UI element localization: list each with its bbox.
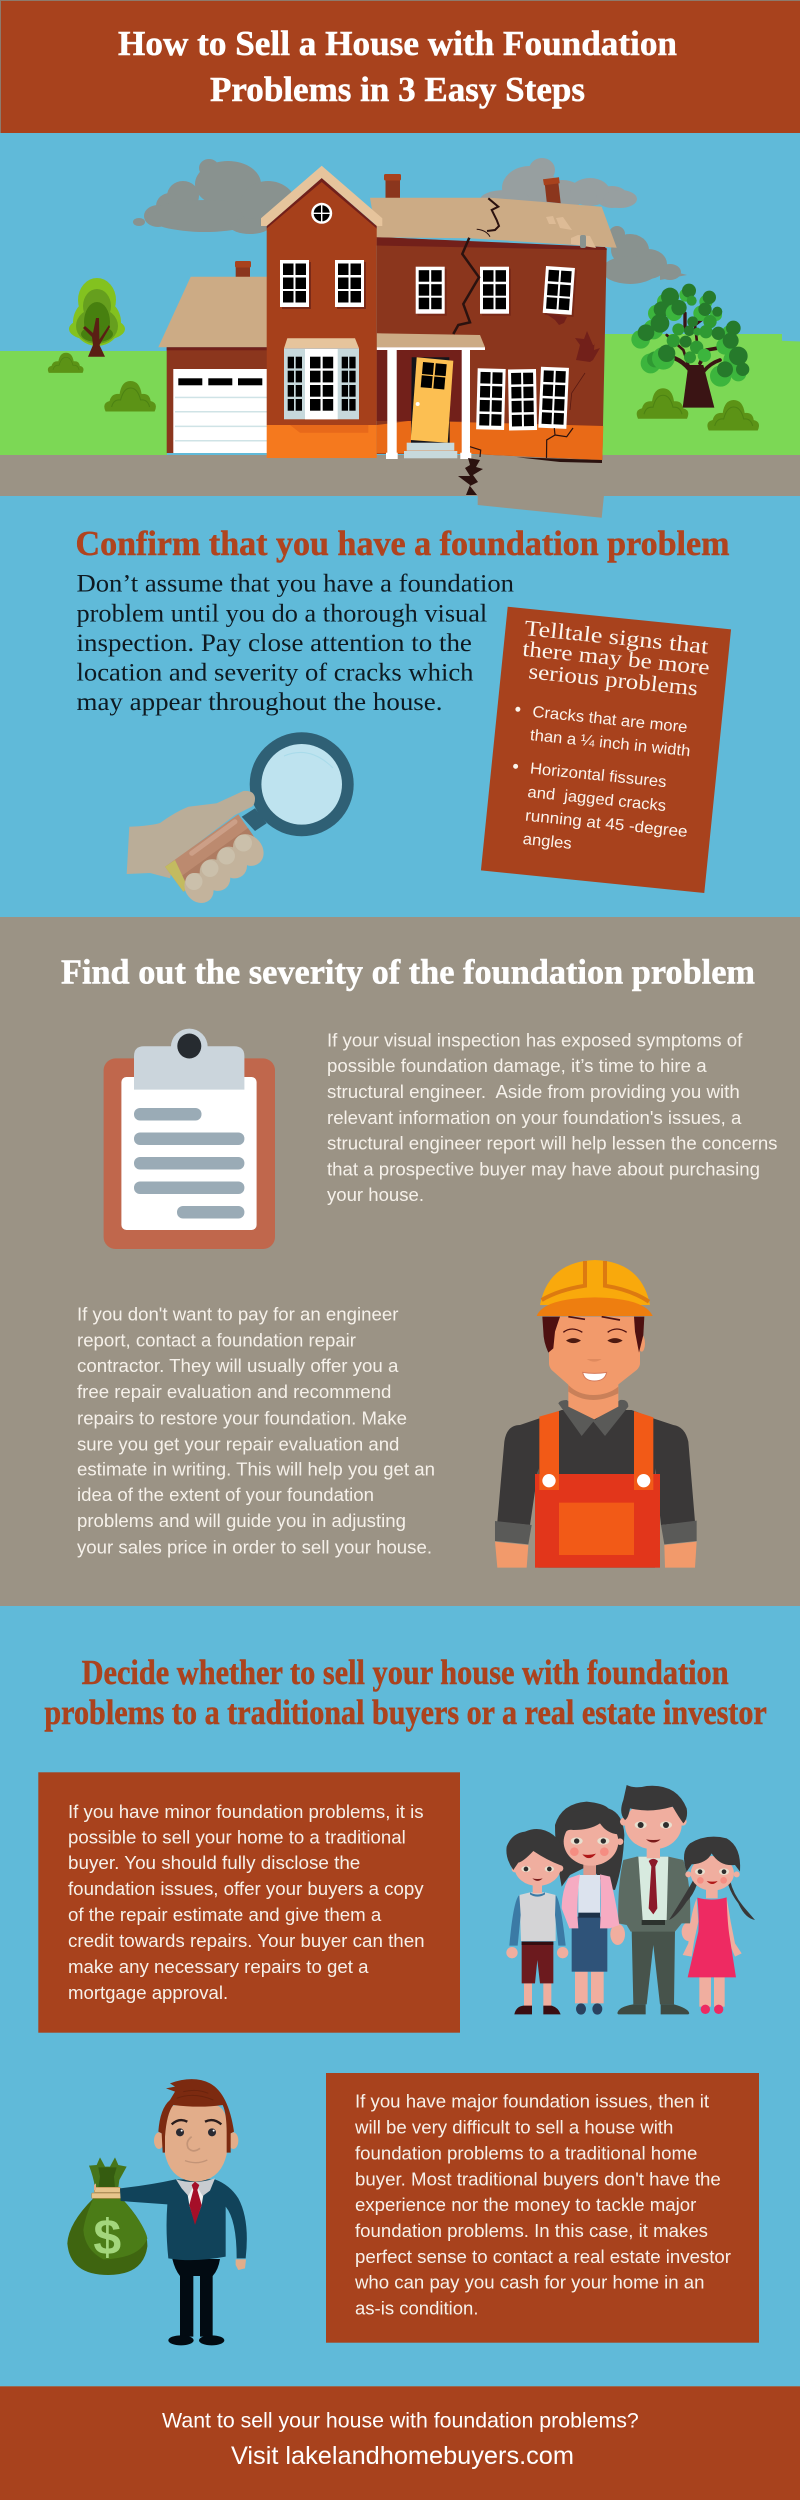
title banner: How to Sell a House with Foundation [118, 24, 677, 63]
son [506, 1829, 568, 2014]
icon: hand with magnifying glass [127, 732, 354, 909]
panel: minor foundation problems: possible to sell your home to a traditional [68, 1827, 406, 1847]
text block: hire a structural engineer: structural engineer. Aside from providing you with [327, 1082, 740, 1102]
panel: minor foundation problems: buyer. You should fully disclose the [68, 1853, 360, 1873]
text block: hire a structural engineer: If your visual inspection has exposed symptoms of [327, 1030, 743, 1050]
left grey cloud [133, 159, 296, 234]
daughter [669, 1837, 755, 2014]
title banner: Problems in 3 Easy Steps [210, 70, 585, 109]
panel: telltale signs: and jagged cracks [527, 784, 667, 815]
text block: contractor advice: free repair evaluation and recommend [77, 1382, 391, 1402]
text block: contractor advice: your sales price in order to sell your house. [77, 1538, 432, 1558]
text block: inspection advice: Don’t assume that you have a foundation [76, 571, 515, 598]
text block: contractor advice: contractor. They will usually offer you a [77, 1356, 399, 1376]
panel: major foundation issues: as-is condition. [355, 2299, 478, 2319]
tower [261, 166, 382, 458]
panel: minor foundation problems: foundation issues, offer your buyers a copy [68, 1879, 424, 1899]
panel: major foundation issues: buyer. Most traditional buyers don't have the [355, 2169, 721, 2189]
lower right grey cloud [602, 226, 687, 284]
upper right grey cloud [480, 158, 637, 210]
panel: telltale signs: Cracks that are more [532, 704, 688, 736]
panel: minor foundation problems: credit towards repairs. Your buyer can then [68, 1931, 425, 1951]
text block: contractor advice: repairs to restore your foundation. Make [77, 1408, 407, 1428]
bay window [284, 338, 359, 419]
right tree [631, 284, 749, 408]
bushes [48, 353, 759, 430]
text block: hire a structural engineer: that a prospective buyer may have about purchasing [327, 1159, 760, 1179]
porch [377, 333, 485, 459]
icon: clipboard [104, 1029, 275, 1249]
money bag: $ [93, 2209, 121, 2265]
panel: telltale signs: Horizontal fissures [529, 760, 667, 791]
icon: construction worker [495, 1260, 697, 1568]
text block: hire a structural engineer: structural engineer report will help lessen the concerns [327, 1134, 778, 1154]
panel: major foundation issues: who can pay you cash for your home in an [354, 2273, 704, 2293]
panel: minor foundation problems [38, 1772, 460, 2033]
panel: major foundation issues: perfect sense to contact a real estate investor [355, 2247, 731, 2267]
text block: contractor advice: report, contact a foundation repair [77, 1330, 356, 1350]
heading: severity: Find out the severity of the foundation problem [61, 952, 755, 991]
text block: inspection advice: may appear throughout the house. [76, 689, 442, 716]
panel: major foundation issues [326, 2073, 759, 2343]
money bag [67, 2157, 147, 2275]
text block: hire a structural engineer: possible foundation damage, it’s time to hire a [327, 1056, 708, 1076]
footer call to action [0, 2386, 800, 2500]
text block: hire a structural engineer: your house. [327, 1185, 424, 1205]
main wall [370, 198, 617, 460]
mother back hair [555, 1802, 624, 1890]
footer call to action: Want to sell your house with foundation problems? [162, 2410, 639, 2433]
panel: major foundation issues: foundation problems to a traditional home [355, 2143, 697, 2163]
panel: telltale signs: than a ¼ inch in width [529, 727, 691, 760]
footer call to action: Visit lakelandhomebuyers.com [231, 2442, 574, 2470]
road [0, 455, 800, 518]
text block: hire a structural engineer [327, 1030, 778, 1205]
panel: severity section [0, 917, 800, 1606]
father [610, 1785, 695, 2014]
text block: contractor advice: idea of the extent of your foundation [77, 1485, 374, 1505]
panel: telltale signs: angles [522, 831, 572, 853]
panel: minor foundation problems: of the repair estimate and give them a [68, 1905, 382, 1925]
man [94, 2079, 247, 2345]
grass [0, 334, 800, 456]
illustration: cracked house scene [0, 158, 800, 518]
heading: confirm foundation problem: Confirm that you have a foundation problem [76, 524, 730, 563]
panel: telltale signs: there may be more [521, 636, 711, 680]
text block: inspection advice: problem until you do a thorough visual [76, 601, 487, 628]
orange foundation right [377, 421, 603, 460]
text block: contractor advice [77, 1304, 435, 1558]
panel: major foundation issues: experience nor the money to tackle major [355, 2195, 696, 2215]
text block: hire a structural engineer: relevant information on your foundation's issues, a [327, 1108, 742, 1128]
text block: contractor advice: sure you get your repair evaluation and [77, 1434, 399, 1454]
panel: telltale signs: serious problems [527, 658, 699, 700]
text block: inspection advice: inspection. Pay close attention to the [76, 630, 472, 657]
text block: contractor advice: If you don't want to pay for an engineer [77, 1304, 398, 1324]
windows on damaged wall [416, 266, 600, 430]
panel: major foundation issues: If you have major foundation issues, then it [355, 2092, 709, 2112]
illustration: businessman with money bag [67, 2079, 247, 2345]
title banner [0, 0, 800, 133]
garage [158, 261, 267, 453]
panel: minor foundation problems: make any necessary repairs to get a [68, 1957, 370, 1977]
text block: inspection advice: location and severity of cracks which [76, 660, 474, 687]
back roof and chimneys [384, 174, 561, 203]
text block: inspection advice [76, 571, 515, 716]
mother [562, 1808, 623, 2015]
text block: contractor advice: estimate in writing. This will help you get an [77, 1459, 435, 1479]
panel: telltale signs: Telltale signs that [523, 615, 710, 659]
panel: major foundation issues: will be very difficult to sell a house with [354, 2117, 673, 2137]
panel: major foundation issues: foundation problems. In this case, it makes [355, 2221, 708, 2241]
text block: contractor advice: problems and will guide you in adjusting [77, 1511, 406, 1531]
heading: decide traditional buyer or investor [44, 1653, 767, 1732]
ground crack [458, 458, 483, 495]
panel: telltale signs [481, 607, 731, 893]
panel: minor foundation problems: mortgage approval. [68, 1983, 228, 2003]
panel: telltale signs: running at 45 -degree [524, 808, 688, 841]
illustration: family [506, 1785, 755, 2015]
left tree [69, 278, 125, 357]
panel: minor foundation problems: If you have minor foundation problems, it is [68, 1802, 424, 1822]
wall and roof cracks [453, 198, 585, 458]
